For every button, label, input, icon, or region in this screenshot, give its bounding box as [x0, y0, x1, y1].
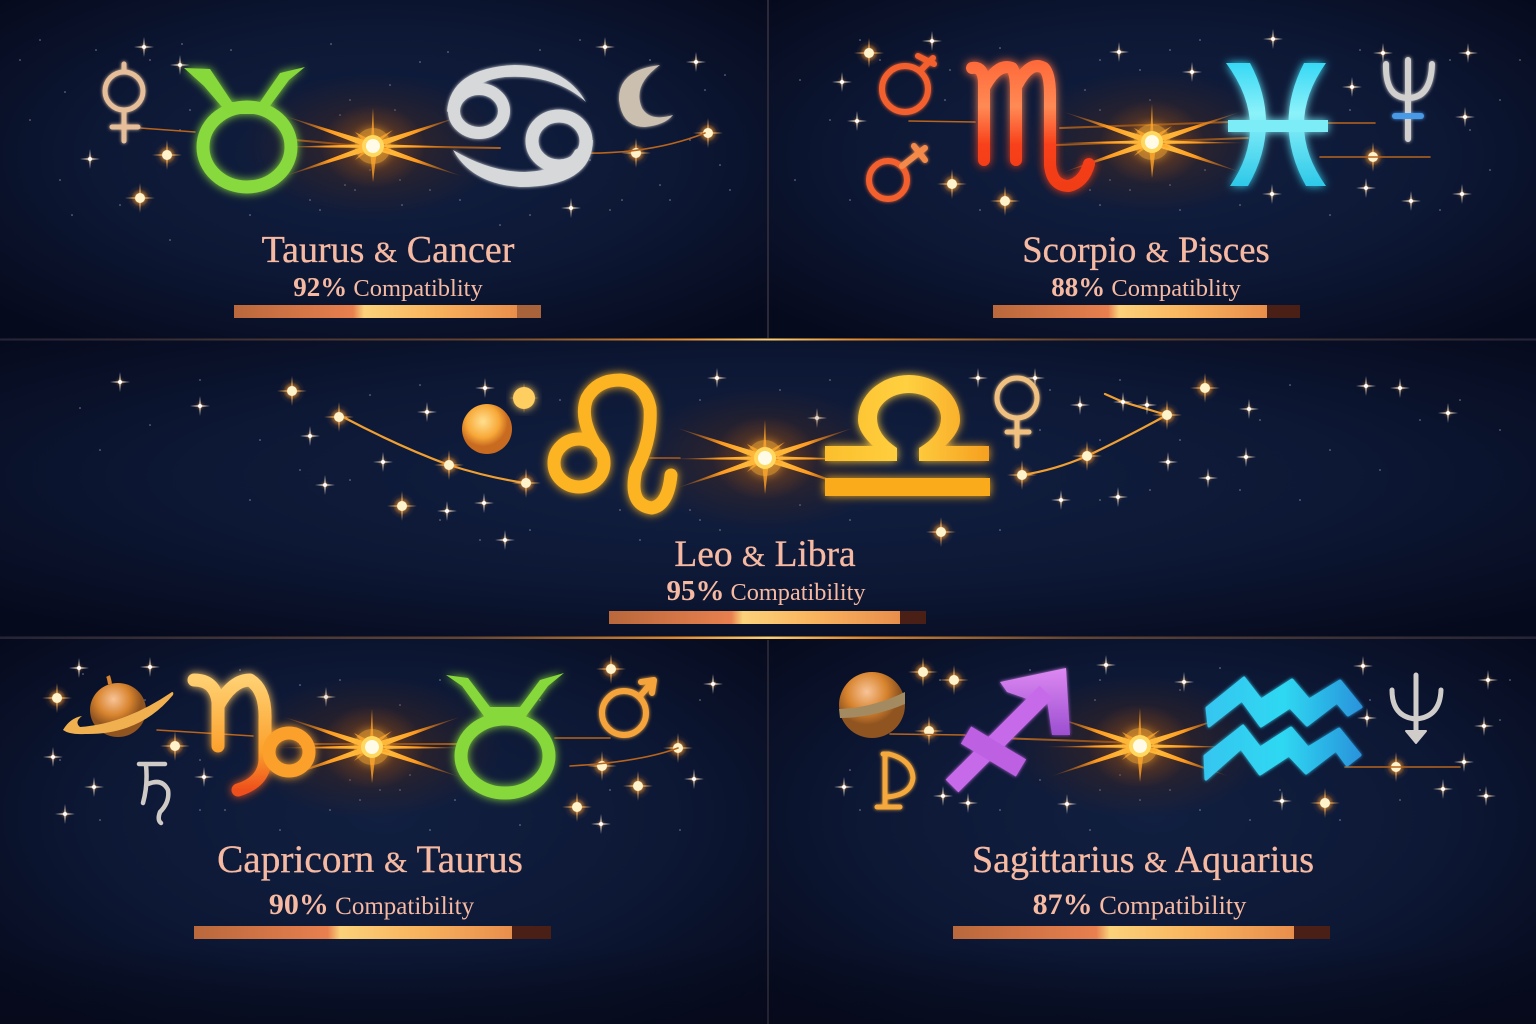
compatibility score: 92% Compatiblity [293, 272, 483, 302]
title: Taurus & Cancer [262, 229, 515, 271]
star field [795, 29, 1520, 216]
icon: aquarius symbol [1205, 678, 1361, 779]
icon: cancer symbol [447, 65, 593, 187]
icon: pluto symbol [877, 754, 913, 807]
icon: planet spheres [462, 383, 539, 454]
progress bar [993, 305, 1300, 318]
icon: taurus symbol [446, 673, 564, 793]
progress bar [609, 611, 926, 624]
title: Sagittarius & Aquarius [972, 839, 1314, 881]
flare and connecting rays [140, 74, 705, 218]
flare [635, 386, 895, 530]
panel: capricorn and taurus [0, 639, 767, 1024]
compatibility score: 87% Compatibility [1033, 888, 1247, 921]
icon: neptune trident [1386, 60, 1432, 139]
icon: sagittarius symbol [952, 668, 1070, 786]
star field [20, 37, 730, 240]
star field [834, 655, 1510, 830]
flare and connecting rays [909, 70, 1430, 214]
bottom vignette [0, 945, 1536, 1024]
progress bar [953, 926, 1330, 939]
icon: libra symbol [825, 375, 990, 496]
compatibility score: 95% Compatibility [666, 575, 866, 607]
progress bar [234, 305, 541, 318]
star field [80, 368, 1500, 550]
icon: saturn symbol [139, 764, 168, 823]
icon: scorpio symbol [972, 66, 1089, 186]
compatibility score: 88% Compatiblity [1051, 272, 1241, 302]
star field [42, 654, 723, 834]
icon: capricorn symbol [194, 680, 309, 790]
panel: taurus and cancer [0, 0, 767, 338]
icon: leo symbol [554, 380, 671, 508]
constellation lines [345, 392, 1182, 498]
icon: pisces symbol [1226, 63, 1328, 186]
icon: mars symbol [602, 680, 654, 735]
panel: leo and libra [0, 341, 1536, 636]
title: Scorpio & Pisces [1022, 229, 1270, 270]
flare and connecting rays [157, 675, 678, 819]
icon: mars symbols [869, 56, 934, 199]
title: Capricorn & Taurus [217, 837, 523, 881]
panel: scorpio and pisces [769, 0, 1536, 338]
icon: jupiter planet [839, 672, 905, 738]
icon: venus symbol [997, 378, 1037, 446]
compatibility score: 90% Compatibility [269, 888, 475, 921]
icon: taurus symbol [184, 67, 305, 187]
icon: moon [619, 65, 673, 127]
progress bar [194, 926, 551, 939]
panel: sagittarius and aquarius [769, 639, 1536, 1024]
icon: venus symbol [105, 64, 143, 141]
icon: saturn planet [63, 676, 173, 737]
title: Leo & Libra [674, 534, 856, 575]
flare and connecting rays [890, 674, 1460, 818]
icon: neptune trident [1392, 675, 1441, 743]
